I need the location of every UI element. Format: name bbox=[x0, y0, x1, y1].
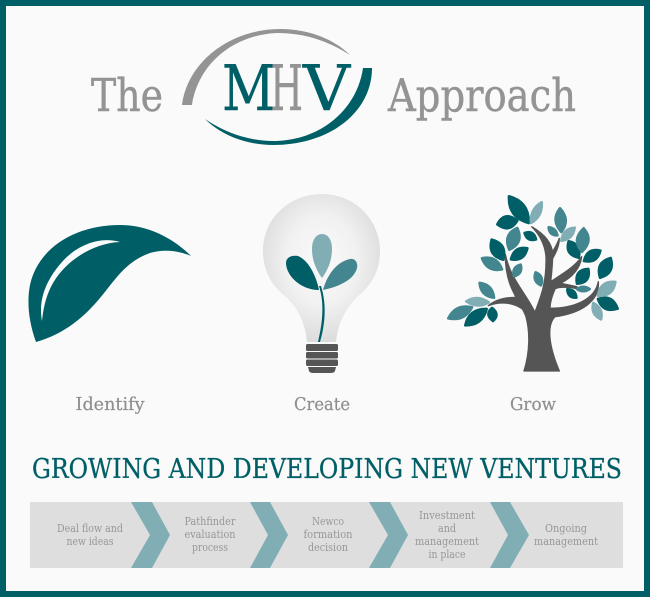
step 3 text: formation bbox=[304, 527, 353, 541]
step 4 text bbox=[415, 508, 479, 561]
arrow 1 bbox=[131, 502, 170, 568]
logo grey arc bbox=[182, 29, 350, 105]
step 2 text: process bbox=[192, 540, 228, 554]
title: The MHV Approach bbox=[91, 29, 576, 145]
step 3 text bbox=[304, 514, 353, 554]
step 2 text: Pathfinder bbox=[184, 514, 236, 528]
logo teal arc bbox=[205, 68, 372, 145]
step 5 text: Ongoing bbox=[545, 521, 588, 535]
step 2 text bbox=[184, 514, 236, 554]
step 4 text: Investment bbox=[419, 508, 475, 522]
step 1 text: new ideas bbox=[66, 534, 114, 548]
title word: The: The bbox=[91, 69, 163, 122]
arrow 2 bbox=[250, 502, 288, 568]
arrow 4 bbox=[490, 502, 529, 568]
light teal leaves bbox=[466, 202, 615, 319]
process bar bbox=[30, 502, 623, 568]
bulb screw base bbox=[306, 344, 338, 373]
step 1 text bbox=[57, 521, 124, 548]
label: Create: Create bbox=[294, 394, 350, 415]
step 5 text bbox=[534, 521, 598, 548]
bar background bbox=[30, 502, 623, 568]
step 4 text: in place bbox=[428, 547, 466, 561]
icon: tree bbox=[448, 196, 618, 371]
dark leaves bbox=[465, 196, 618, 325]
step 2 text: evaluation bbox=[184, 527, 236, 541]
step 5 text: management bbox=[534, 534, 598, 548]
step 4 text: management bbox=[415, 534, 479, 548]
icon: light bulb with sprout bbox=[263, 194, 380, 373]
icon: leaf bbox=[28, 225, 191, 342]
logo letter H: H bbox=[270, 52, 303, 125]
step 4 text: and bbox=[438, 521, 457, 535]
mid teal leaves bbox=[448, 208, 590, 319]
logo letter V: V bbox=[302, 52, 352, 125]
label: Grow: Grow bbox=[510, 394, 557, 415]
sprout bbox=[286, 234, 357, 342]
step 1 text: Deal flow and bbox=[57, 521, 124, 535]
logo letter M: M bbox=[222, 52, 275, 125]
step 3 text: Newco bbox=[312, 514, 344, 528]
arrow 3 bbox=[369, 502, 408, 568]
bulb glass bbox=[263, 194, 380, 342]
title word: Approach: Approach bbox=[387, 69, 576, 122]
step 3 text: decision bbox=[308, 540, 348, 554]
tree trunk and branches bbox=[488, 227, 598, 371]
label: Identify: Identify bbox=[76, 394, 145, 415]
logo: MHV bbox=[182, 29, 372, 145]
